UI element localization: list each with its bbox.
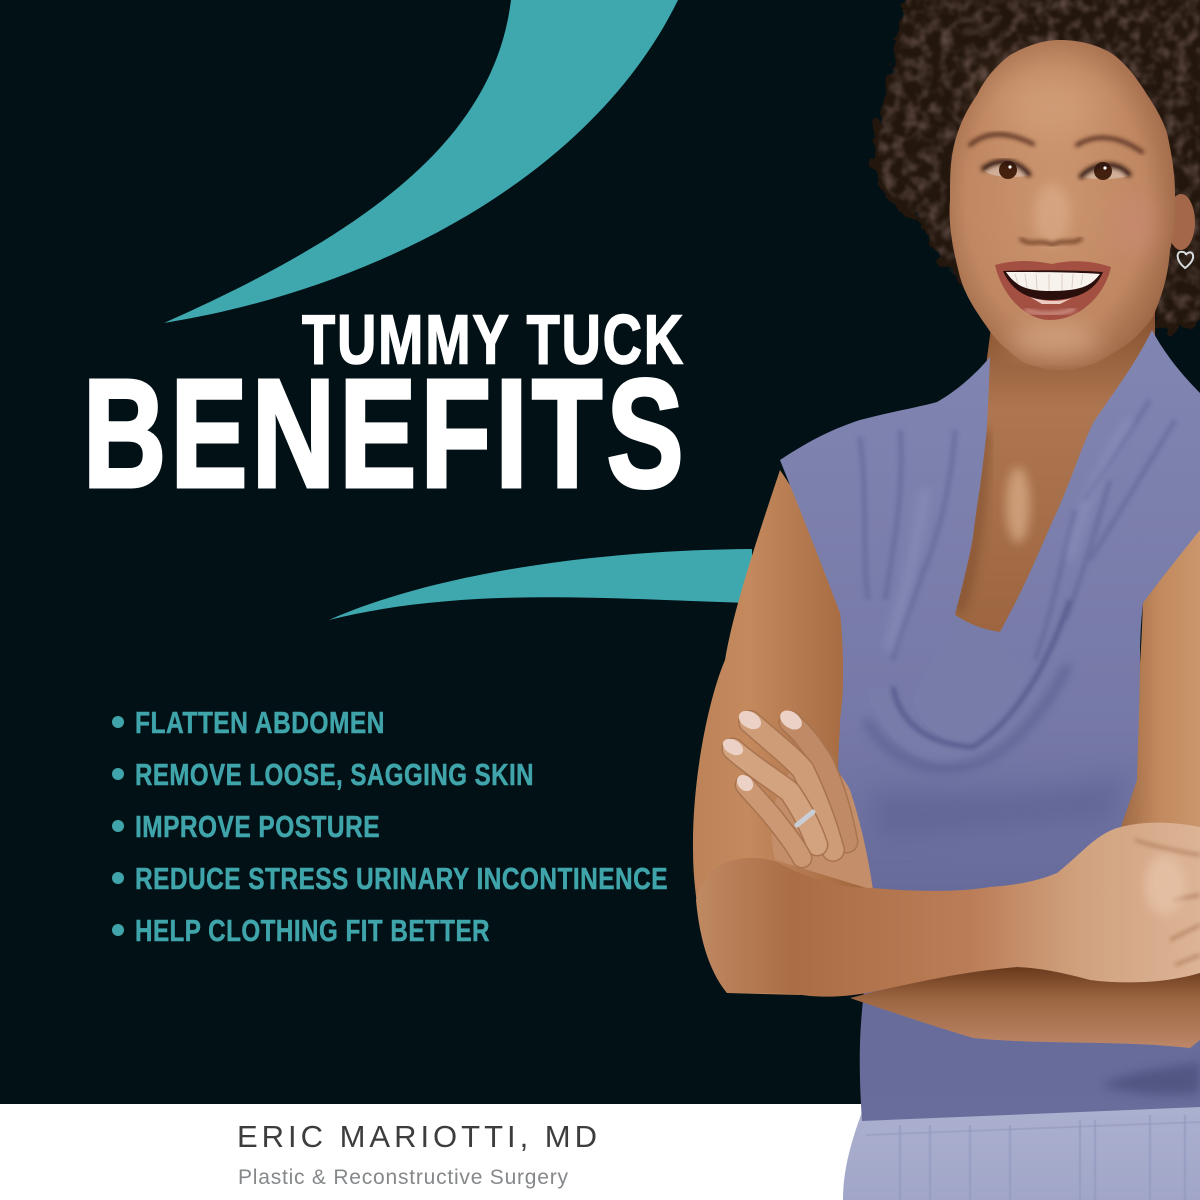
hand on upper arm [720, 707, 873, 890]
earring [1178, 252, 1193, 268]
mouth [995, 261, 1111, 320]
teal swoosh lower [329, 549, 752, 620]
cheek shading [1113, 193, 1157, 257]
shirt midriff shading [870, 775, 1125, 840]
under forearm [850, 960, 1200, 1048]
tank neckline panel [912, 615, 1030, 745]
shirt hem shadow [1100, 1062, 1200, 1095]
footer band [0, 1104, 1200, 1200]
bullet: improve posture: IMPROVE POSTURE [135, 809, 380, 844]
chin highlight [1010, 326, 1100, 354]
left upper arm [693, 470, 880, 995]
title: tummy tuck: TUMMY TUCK [302, 300, 685, 378]
bullet: flatten abdomen: FLATTEN ABDOMEN [135, 705, 385, 740]
eyebrows [970, 134, 1142, 152]
forehead highlight [995, 73, 1105, 137]
nose [1020, 185, 1082, 245]
photo: smiling woman [693, 0, 1200, 1200]
teal swoosh top [164, 0, 678, 323]
wedding ring [797, 812, 813, 825]
crossed forearm and hand [696, 823, 1200, 997]
drape loop [866, 620, 1070, 766]
eyes [982, 161, 1130, 180]
face [950, 40, 1195, 370]
neck and chest [950, 310, 1155, 640]
fingers [733, 722, 847, 858]
right arm [1118, 525, 1200, 835]
logo: specialty: Plastic & Reconstructive Surgery [238, 1166, 568, 1189]
ear [1167, 194, 1195, 250]
hair [874, 0, 1200, 331]
bullet: reduce incontinence: REDUCE STRESS URINARY INCONTINENCE [135, 861, 668, 896]
skirt [843, 1100, 1200, 1200]
fingernails [720, 707, 805, 794]
bullet: remove loose skin: REMOVE LOOSE, SAGGING SKIN [135, 757, 534, 792]
title: benefits: BENEFITS [83, 348, 688, 520]
benefits list [112, 705, 668, 948]
hand back [772, 757, 873, 890]
logo: surgeon name: ERIC MARIOTTI, MD [237, 1119, 597, 1154]
shirt torso [780, 330, 1200, 1121]
bullet: clothing fit: HELP CLOTHING FIT BETTER [135, 913, 490, 948]
cowl neckline folds [860, 400, 1175, 768]
